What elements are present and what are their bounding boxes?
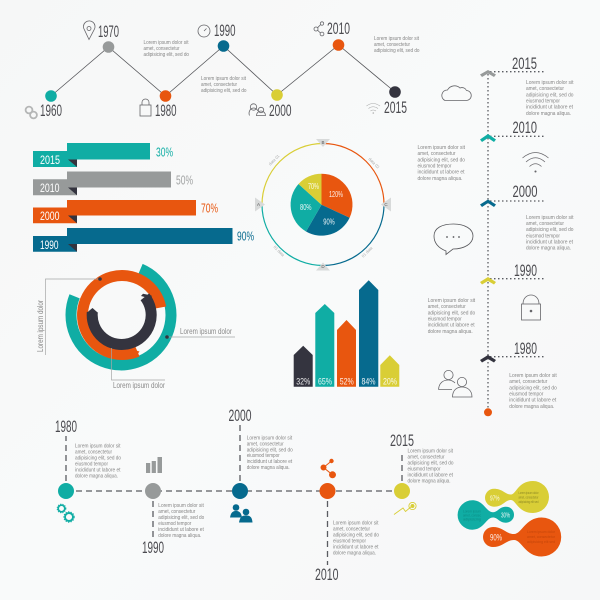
bottom text block 1990: eiusmod tempor	[158, 521, 191, 527]
right text block 2015: dolore magna aliqua.	[526, 111, 571, 117]
right text block 2010: Lorem ipsum dolor sit	[418, 145, 465, 151]
right text block 1990: amet, consectetur	[428, 304, 466, 310]
bottom text block 2000: adipisicing elit, sed do	[247, 447, 293, 453]
orange ring	[83, 276, 161, 355]
circular pie chart: D	[321, 264, 325, 269]
right text block 2000: dolore magna aliqua.	[526, 246, 571, 252]
bottom text block 2000	[247, 435, 293, 471]
right text block 1980: incididunt ut labore et	[509, 398, 557, 404]
bottom text block 2010: Lorem ipsum dolor sit	[333, 521, 379, 527]
right text block 1980: dolore magna aliqua.	[509, 404, 554, 410]
ring labels: Lorem ipsum dolor	[180, 327, 232, 336]
bottom text block 2010: dolore magna aliqua.	[333, 550, 376, 556]
chevron 2010	[480, 134, 496, 142]
node 2010	[320, 483, 336, 499]
yellow blob: adipisicing elit sed	[518, 500, 538, 504]
year 1970: 1970	[98, 23, 119, 41]
bottom text block 1990: adipisicing elit, sed do	[158, 515, 204, 521]
bottom text block 1990: amet, consectetur	[158, 509, 195, 515]
marker 2015	[389, 86, 401, 98]
dark ring tips	[87, 294, 152, 313]
right text block 1990: eiusmod tempor	[428, 316, 462, 322]
icon: people large	[438, 370, 472, 397]
year 2000: 2000	[512, 183, 538, 201]
ring markers	[255, 139, 391, 270]
year 2010: 2010	[315, 566, 338, 584]
ring labels: data 01	[267, 153, 281, 166]
icon: people blue	[230, 504, 252, 522]
year 1990: 1990	[514, 262, 537, 280]
right text block 1980: eiusmod tempor	[509, 392, 543, 398]
year 1980: 1980	[55, 418, 77, 436]
arrow labels: 65%	[318, 376, 332, 386]
leader dots	[98, 277, 169, 339]
bar 1990: 90%	[237, 230, 254, 244]
bottom text block 1990: incididunt ut labore et	[158, 527, 204, 533]
orange blob	[483, 518, 561, 556]
ring labels	[36, 300, 232, 390]
outer ring	[262, 144, 384, 266]
orange ring tip	[130, 350, 140, 358]
bar 2010	[33, 172, 193, 195]
ring labels: 01 data	[360, 245, 374, 258]
bottom text block 1990: dolore magna aliqua.	[158, 533, 201, 539]
right text block 2000: incididunt ut labore et	[526, 239, 573, 245]
text block 1	[144, 40, 189, 58]
circular pie chart: B	[321, 140, 325, 145]
ring labels	[267, 153, 381, 258]
node 1990	[145, 483, 161, 499]
orange blob: 90%	[490, 532, 502, 542]
year 1980: 1980	[155, 102, 176, 120]
arrow 20%	[380, 355, 399, 387]
bottom text block 2015: adipisicing elit, sed do	[408, 461, 454, 467]
right text block 2010	[418, 145, 465, 182]
text block 2: adipisicing elit, sed do	[201, 88, 246, 94]
marker 1990	[218, 40, 229, 52]
yellow blob: Lorem ipsum dolor	[518, 491, 539, 495]
bottom text block 1980: adipisicing elit, sed do	[75, 456, 121, 462]
chevron 1990	[480, 277, 496, 284]
teal blob: 30%	[501, 512, 510, 520]
node 2015	[394, 483, 410, 499]
circular pie chart: A	[257, 202, 260, 207]
year 2000: 2000	[269, 102, 292, 120]
year 2010: 2010	[512, 119, 537, 137]
text block 2: amet, consectetur	[201, 82, 237, 88]
icon: cloud	[442, 86, 471, 101]
ring labels: 01 data	[273, 244, 286, 258]
bottom text block 2015: eiusmod tempor	[408, 466, 441, 472]
bottom text block 2000: eiusmod tempor	[247, 453, 280, 459]
right text block 2000	[526, 215, 574, 252]
bottom text block 1980	[75, 444, 121, 479]
year 2015: 2015	[512, 55, 537, 73]
text block 1: Lorem ipsum dolor sit	[144, 40, 189, 46]
right text block 1980: amet, consectetur	[509, 379, 547, 385]
end dot	[484, 408, 492, 416]
orange blob: amet, consectetur	[527, 535, 556, 539]
icon: gears gray	[26, 107, 37, 118]
bottom text block 2015: Lorem ipsum dolor sit	[408, 449, 453, 455]
zigzag timeline	[40, 20, 407, 120]
arrow 65%	[315, 304, 334, 387]
bottom text block 1980: eiusmod tempor	[75, 462, 108, 468]
icon: people	[249, 104, 266, 116]
marker 2010	[333, 39, 344, 51]
icon: bar chart gray	[146, 457, 162, 473]
right text block 1990	[428, 298, 476, 335]
bottom text block 2015: dolore magna aliqua.	[408, 478, 450, 484]
right text block 2000: Lorem ipsum dolor sit	[526, 215, 574, 221]
arrow 52%	[337, 320, 356, 387]
icon: location pin	[83, 21, 95, 40]
teal ring	[71, 269, 171, 365]
right text block 2000: eiusmod tempor	[526, 233, 560, 239]
arrow labels: 84%	[362, 376, 376, 386]
ribbon bar chart	[33, 143, 254, 252]
chevron 2015	[480, 70, 496, 77]
icon: share	[314, 22, 324, 36]
bottom text block 2000: Lorem ipsum dolor sit	[247, 435, 293, 441]
arrow 32%	[294, 346, 313, 387]
bottom text block 1990: Lorem ipsum dolor sit	[158, 503, 204, 509]
bar 2015	[33, 143, 173, 167]
bottom text block 2010	[333, 521, 379, 556]
marker 1960	[45, 90, 57, 102]
circular pie chart: C	[384, 202, 388, 207]
bottom text block 1980: incididunt ut labore et	[75, 468, 121, 474]
teal blob: amet, consec	[463, 514, 481, 518]
pie slices	[291, 174, 353, 236]
text block 3: Lorem ipsum dolor sit	[374, 36, 419, 42]
right text block 2010: eiusmod tempor	[418, 164, 452, 170]
bar 1990: 1990	[40, 240, 58, 252]
icon: share orange	[321, 459, 336, 478]
right text block 1980: Lorem ipsum dolor sit	[509, 373, 557, 379]
right text block 1990: Lorem ipsum dolor sit	[428, 298, 476, 304]
text block 2: Lorem ipsum dolor sit	[201, 76, 246, 82]
teal blob: adipisicing	[463, 518, 481, 522]
yellow blob	[485, 481, 549, 513]
right text block 2010: dolore magna aliqua.	[418, 176, 462, 182]
arrow labels: 52%	[340, 376, 354, 386]
text block 2	[201, 76, 246, 94]
bottom text block 2015: incididunt ut labore et	[408, 472, 453, 478]
chevron 1980	[480, 355, 496, 362]
chevron 2000	[480, 200, 496, 207]
bottom text block 1990	[158, 503, 204, 539]
icon: wifi large	[522, 152, 548, 172]
ring labels: Lorem ipsum dolor	[113, 381, 165, 390]
bottom text block 1980: Lorem ipsum dolor sit	[75, 444, 121, 450]
bottom text block 2000: incididunt ut labore et	[247, 459, 293, 465]
bottom text block 1980: amet, consectetur	[75, 450, 112, 456]
teal blob: Lorem ipsum	[463, 510, 481, 514]
bar 2015: 30%	[156, 146, 173, 160]
marker 2000	[271, 89, 283, 101]
text block 1: amet, consectetur	[144, 46, 180, 52]
right text block 2015: amet, consectetur	[526, 86, 564, 92]
horizontal timeline	[55, 407, 414, 584]
yellow blob: amet, consectetur	[518, 496, 539, 500]
ring labels: Lorem ipsum dolor	[36, 300, 45, 352]
icon: wifi	[366, 104, 380, 114]
ring labels: data 02	[368, 156, 381, 170]
text block 3: amet, consectetur	[374, 42, 410, 48]
blob chart	[458, 481, 561, 556]
right text block 2015: incididunt ut labore et	[526, 105, 573, 111]
bottom text block 2015: amet, consectetur	[408, 455, 445, 461]
bottom text block 2015	[408, 449, 454, 484]
right text block 1980	[509, 373, 557, 410]
text block 1: adipisicing elit, sed do	[144, 52, 189, 58]
marker 1970	[103, 41, 114, 53]
bar 2015: 2015	[40, 155, 60, 167]
arrow labels	[296, 376, 397, 386]
right text block 2015: eiusmod tempor	[526, 98, 560, 104]
bottom text block 2010: adipisicing elit, sed do	[333, 533, 379, 539]
year 1960: 1960	[40, 102, 62, 120]
arrow labels: 20%	[383, 376, 397, 386]
yellow blob: 97%	[490, 494, 500, 502]
bar 2000: 70%	[201, 202, 218, 216]
bottom text block 2000: dolore magna aliqua.	[247, 465, 290, 471]
right text block 2010: amet, consectetur	[418, 151, 456, 157]
pie labels: 120%	[329, 190, 343, 199]
year 1980: 1980	[514, 340, 537, 358]
year 2015: 2015	[384, 99, 407, 117]
right text block 2000: amet, consectetur	[526, 221, 564, 227]
bar 2010: 50%	[176, 174, 193, 188]
year 2010: 2010	[327, 20, 350, 38]
icon: clock	[198, 25, 210, 37]
pie labels: 70%	[308, 182, 319, 191]
leader lines	[46, 279, 235, 380]
pie labels	[300, 182, 343, 226]
right text block 1990: dolore magna aliqua.	[428, 329, 473, 335]
bottom text block 2010: incididunt ut labore et	[333, 544, 379, 550]
bar 2000: 2000	[40, 211, 60, 223]
node 1980	[58, 483, 74, 499]
right text block 1980: adipisicing elit, sed do	[509, 385, 557, 391]
right text block 2000: adipisicing elit, sed do	[526, 227, 574, 233]
icon: growth chart yellow	[394, 502, 416, 514]
bottom text block 2010: eiusmod tempor	[333, 538, 366, 544]
right text block 2015: adipisicing elit, sed do	[526, 92, 574, 98]
marker 1980	[160, 90, 171, 102]
circular pie chart	[255, 139, 391, 270]
orange blob: adipisicing elit sed	[527, 540, 555, 544]
bottom text block 2000: amet, consectetur	[247, 441, 284, 447]
year 2015: 2015	[390, 432, 414, 450]
arrow bar chart	[294, 280, 399, 387]
year 1990: 1990	[214, 22, 236, 40]
teal blob	[458, 500, 514, 530]
right text block 2015	[526, 80, 574, 117]
icon: speech bubble	[434, 224, 473, 254]
bar 2000	[33, 200, 218, 223]
bar 2010: 2010	[40, 183, 60, 195]
bottom text block 2010: amet, consectetur	[333, 527, 370, 533]
year 1990: 1990	[142, 539, 164, 557]
arrow labels: 32%	[296, 376, 310, 386]
right text block 2010: adipisicing elit, sed do	[418, 157, 465, 163]
concentric ring chart	[36, 269, 235, 390]
icon: gears teal	[57, 504, 74, 522]
right text block 1990: incididunt ut labore et	[428, 323, 475, 329]
bar 1990	[33, 228, 254, 252]
text block 3	[374, 36, 420, 54]
pie labels: 90%	[323, 218, 335, 226]
pie labels: 80%	[300, 203, 312, 212]
year 2000: 2000	[228, 407, 252, 425]
right text block 1990: adipisicing elit, sed do	[428, 310, 475, 316]
dark ring	[92, 297, 151, 345]
bottom text block 1980: dolore magna aliqua.	[75, 473, 118, 479]
node 2000	[232, 483, 248, 499]
icon: padlock	[140, 99, 151, 116]
vertical timeline	[480, 55, 544, 416]
icon: padlock large	[522, 295, 540, 320]
arrow 84%	[359, 280, 378, 387]
right text block 2010: incididunt ut labore et	[418, 170, 465, 176]
right text block 2015: Lorem ipsum dolor sit	[526, 80, 574, 86]
orange blob: Lorem ipsum dolor	[527, 530, 556, 534]
text block 3: adipisicing elit, sed do	[374, 48, 420, 54]
